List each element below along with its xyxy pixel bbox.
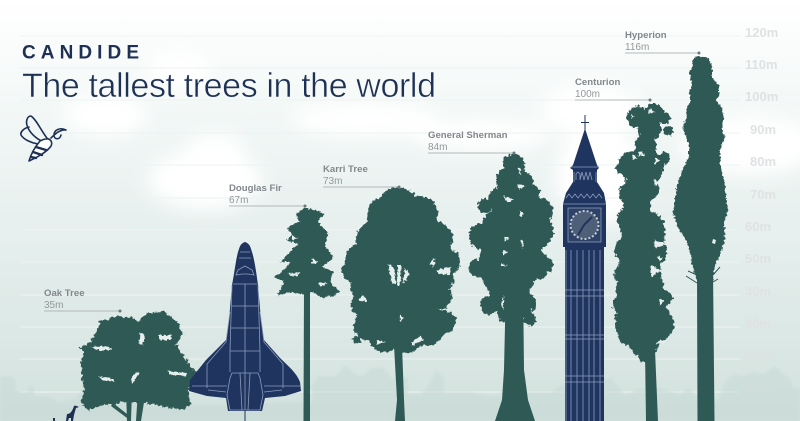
height axis labels: 50m xyxy=(745,251,771,266)
icon: bee logo xyxy=(21,116,66,161)
brand name: CANDIDE xyxy=(22,42,139,64)
oak tree xyxy=(80,312,207,421)
height axis labels: 60m xyxy=(745,219,771,234)
callout: centurion: 100m xyxy=(575,89,600,100)
height axis labels: 100m xyxy=(745,89,778,104)
height axis labels: 110m xyxy=(745,57,778,72)
callout: douglas fir: 67m xyxy=(229,195,248,206)
callout: general sherman: 84m xyxy=(428,142,447,153)
callout: oak tree xyxy=(44,288,122,312)
callout: oak tree: Oak Tree xyxy=(44,288,85,299)
callout: oak tree: 35m xyxy=(44,300,63,311)
callout: hyperion xyxy=(625,30,700,54)
height axis labels: 30m xyxy=(745,316,771,331)
height axis labels: 40m xyxy=(745,284,771,299)
height axis labels: 20m xyxy=(745,348,771,363)
height axis labels: 90m xyxy=(750,122,776,137)
height axis labels: 70m xyxy=(750,187,776,202)
space shuttle xyxy=(189,242,301,421)
karri tree xyxy=(342,187,460,421)
clock face xyxy=(568,208,601,242)
height axis labels xyxy=(745,25,778,396)
title: The tallest trees in the world xyxy=(22,67,436,105)
callout: centurion: Centurion xyxy=(575,77,620,88)
giraffe and person xyxy=(53,406,79,421)
callout: general sherman xyxy=(428,130,516,154)
callout: karri tree: 73m xyxy=(323,176,342,187)
callout: hyperion: 116m xyxy=(625,42,649,53)
height axis labels: 80m xyxy=(750,154,776,169)
callout: hyperion: Hyperion xyxy=(625,30,667,41)
callout: karri tree: Karri Tree xyxy=(323,164,368,175)
callout: general sherman: General Sherman xyxy=(428,130,508,141)
callout: centurion xyxy=(575,77,652,102)
background clouds xyxy=(63,50,800,225)
big ben xyxy=(563,115,606,421)
callout: douglas fir: Douglas Fir xyxy=(229,183,282,194)
grid lines xyxy=(20,36,740,392)
hyperion xyxy=(673,56,728,421)
height axis labels: 10m xyxy=(745,381,771,396)
centurion xyxy=(613,104,674,421)
callout: douglas fir xyxy=(229,183,306,208)
callout: karri tree xyxy=(323,164,400,188)
douglas fir xyxy=(274,208,340,421)
height axis labels: 120m xyxy=(745,25,778,40)
general sherman xyxy=(469,154,554,421)
distant city skyline xyxy=(0,365,800,421)
